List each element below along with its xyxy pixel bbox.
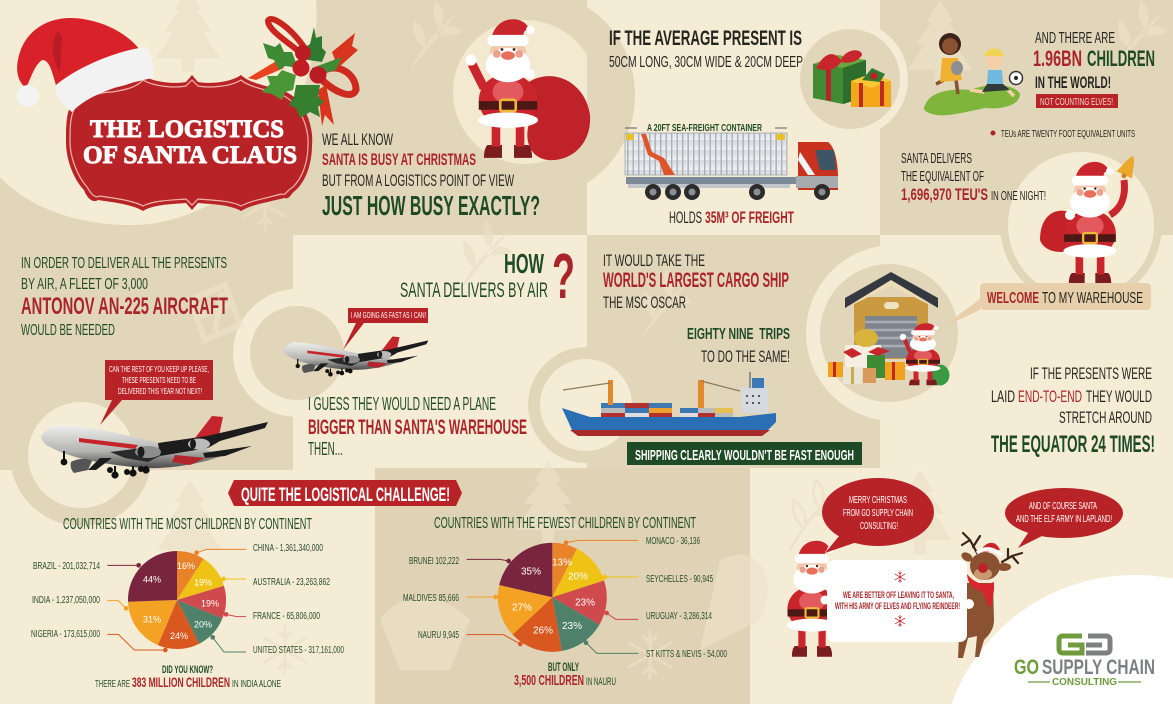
intro text xyxy=(322,130,540,221)
children count text xyxy=(1033,30,1155,92)
pie chart: fewest children: 23% xyxy=(575,598,595,608)
shipping caption xyxy=(627,442,862,465)
santa delivers text: SANTA DELIVERS xyxy=(901,150,972,167)
message card: WE ARE BETTER OFF LEAVING IT TO SANTA, xyxy=(843,590,954,600)
heading: most children: COUNTRIES WITH THE MOST CHILDREN BY CONTINENT xyxy=(63,516,312,533)
bigger plane text xyxy=(308,394,527,459)
logo: go supply chain consulting xyxy=(1014,636,1155,688)
nauru note xyxy=(514,660,616,689)
icon: santa holding card xyxy=(787,541,837,657)
leader lines and labels: most children: AUSTRALIA - 23,263,862 xyxy=(253,577,330,588)
how santa delivers heading xyxy=(400,240,575,312)
did you know note: 383 MILLION CHILDREN xyxy=(132,674,230,690)
title text xyxy=(83,116,297,169)
pie chart: most children: 19% xyxy=(194,578,212,588)
leader lines and labels: fewest children xyxy=(403,536,727,660)
icon: santa with bell xyxy=(1040,152,1141,284)
pie chart: fewest children: 35% xyxy=(521,566,541,578)
leader lines and labels: fewest children: URUGUAY - 3,286,314 xyxy=(646,611,712,622)
freight capacity text: HOLDS xyxy=(669,208,702,227)
icon: large airplane xyxy=(41,416,268,479)
title badge xyxy=(66,75,312,211)
icon: warehouse with santa and gifts xyxy=(828,272,950,386)
intro text: SANTA IS BUSY AT CHRISTMAS xyxy=(322,150,476,169)
intro text: WE ALL KNOW xyxy=(322,130,393,149)
bigger plane text: THEN... xyxy=(308,439,343,459)
pie chart: fewest children: 20% xyxy=(568,572,588,582)
pie chart: fewest children xyxy=(498,543,607,652)
leader lines and labels: most children: NIGERIA - 173,615,000 xyxy=(31,629,100,640)
cargo ship text: THE MSC OSCAR xyxy=(603,293,686,312)
equator text xyxy=(991,364,1155,458)
leader lines and labels: fewest children: BRUNEI 102,222 xyxy=(409,556,459,567)
how santa delivers heading: ? xyxy=(552,240,575,312)
icon: santa with sack xyxy=(466,19,590,160)
children count text: AND THERE ARE xyxy=(1035,30,1115,47)
pie chart: most children: 31% xyxy=(143,614,161,624)
snowflake top xyxy=(895,571,905,583)
heading: fewest children: COUNTRIES WITH THE FEWEST CHILDREN BY CONTINENT xyxy=(434,515,696,532)
pie chart: most children: 44% xyxy=(143,574,161,584)
callout: large plane: DELIVERED THIS YEAR NOT NEXT! xyxy=(118,386,202,396)
children count text: IN THE WORLD! xyxy=(1035,73,1111,92)
pie chart: most children xyxy=(128,551,226,649)
intro text: BUT FROM A LOGISTICS POINT OF VIEW xyxy=(322,171,514,190)
speech bubble: and of course santa: AND OF COURSE SANTA xyxy=(1029,501,1097,512)
not counting elves tag xyxy=(1036,94,1118,108)
callout: large plane: THESE PRESENTS NEED TO BE xyxy=(122,375,196,385)
leader lines and labels: fewest children: MALDIVES 85,666 xyxy=(403,593,459,604)
leader lines and labels: fewest children: NAURU 9,945 xyxy=(418,630,459,641)
did you know note: DID YOU KNOW? xyxy=(162,664,213,676)
icon: reindeer xyxy=(958,533,1022,658)
leader lines and labels: most children: UNITED STATES - 317,161,000 xyxy=(253,645,344,656)
santa delivers text: IN ONE NIGHT! xyxy=(991,188,1046,203)
speech bubble: and of course santa xyxy=(1005,488,1123,548)
freight capacity text xyxy=(669,208,794,227)
children count text: 1.96BN xyxy=(1033,46,1082,71)
pie chart: most children: 24% xyxy=(170,631,188,641)
leader lines and labels: most children: BRAZIL - 201,032,714 xyxy=(33,561,100,572)
how santa delivers heading: SANTA DELIVERS BY AIR xyxy=(400,279,548,302)
speech bubble: merry christmas: FROM GO SUPPLY CHAIN xyxy=(843,508,913,519)
leader lines and labels: most children: CHINA - 1,361,340,000 xyxy=(253,543,323,554)
leader lines and labels: fewest children: SEYCHELLES - 90,945 xyxy=(646,574,713,585)
white logo corner xyxy=(952,575,1173,704)
freight capacity text: 35M³ OF FREIGHT xyxy=(705,208,794,227)
container label: A 20FT SEA-FREIGHT CONTAINER xyxy=(647,123,763,134)
air fleet text xyxy=(21,255,228,339)
speech bubble: welcome xyxy=(941,283,1151,328)
logo: go supply chain consulting: GO xyxy=(1014,656,1039,679)
did you know note: THERE ARE xyxy=(95,678,130,690)
message card: WITH HIS ARMY OF ELVES AND FLYING REINDEER! xyxy=(835,601,960,611)
icon: children playing xyxy=(924,33,1022,115)
equator text: LAID xyxy=(991,387,1015,406)
intro text: JUST HOW BUSY EXACTLY? xyxy=(322,190,540,221)
nauru note: 3,500 CHILDREN xyxy=(514,672,584,689)
bigger plane text: I GUESS THEY WOULD NEED A PLANE xyxy=(308,394,496,414)
callout: small plane xyxy=(343,308,428,350)
leader lines and labels: fewest children: ST KITTS & NEVIS - 54,000 xyxy=(646,649,727,660)
bigger plane text: BIGGER THAN SANTA'S WAREHOUSE xyxy=(308,416,527,439)
leader lines and labels: most children: FRANCE - 65,806,000 xyxy=(253,611,320,622)
leader lines and labels: most children xyxy=(31,543,344,656)
speech bubble: and of course santa: AND THE ELF ARMY IN LAPLAND! xyxy=(1016,514,1112,525)
shipping caption: SHIPPING CLEARLY WOULDN'T BE FAST ENOUGH xyxy=(635,447,854,464)
speech bubble: merry christmas: CONSULTING! xyxy=(860,521,898,532)
icon: container ship xyxy=(562,372,776,436)
air fleet text: ANTONOV AN-225 AIRCRAFT xyxy=(21,293,228,320)
equator text: END-TO-END xyxy=(1018,387,1082,406)
air fleet text: IN ORDER TO DELIVER ALL THE PRESENTS xyxy=(21,255,227,272)
present dimensions text: 50CM LONG, 30CM WIDE & 20CM DEEP xyxy=(609,54,803,71)
icon: container truck xyxy=(625,128,838,200)
not counting elves tag: NOT COUNTING ELVES! xyxy=(1040,97,1113,108)
cargo ship text: EIGHTY NINE TRIPS xyxy=(687,326,790,343)
hands over card xyxy=(820,596,974,609)
icon: gift boxes xyxy=(813,50,891,107)
icon: santa hat xyxy=(17,18,154,112)
cargo ship text: WORLD'S LARGEST CARGO SHIP xyxy=(603,269,789,292)
title text: THE LOGISTICS xyxy=(90,116,284,143)
air fleet text: WOULD BE NEEDED xyxy=(21,322,115,339)
leader lines and labels: fewest children: MONACO - 36,136 xyxy=(646,536,700,547)
speech bubble: merry christmas: MERRY CHRISTMAS xyxy=(849,495,907,506)
callout: large plane: CAN THE REST OF YOU KEEP UP PLEASE, xyxy=(109,364,209,374)
message card xyxy=(827,560,967,642)
banner: quite the logistical challenge xyxy=(228,480,462,506)
present dimensions text xyxy=(609,27,803,71)
santa delivers text xyxy=(901,150,1046,204)
santa delivers text: 1,696,970 TEU'S xyxy=(901,185,988,204)
title text: OF SANTA CLAUS xyxy=(83,142,297,169)
speech bubble: merry christmas xyxy=(822,478,934,553)
pie chart: fewest children: 27% xyxy=(512,602,532,614)
present dimensions text: IF THE AVERAGE PRESENT IS xyxy=(609,27,802,50)
pie chart: most children: 16% xyxy=(177,561,195,571)
pie chart: fewest children: 13% xyxy=(552,558,572,568)
how santa delivers heading: HOW xyxy=(504,248,544,279)
cargo ship text: TO DO THE SAME! xyxy=(701,347,790,366)
pie chart: fewest children: 26% xyxy=(533,626,553,636)
speech bubble: welcome: WELCOME xyxy=(987,290,1039,307)
callout: large plane xyxy=(100,360,213,425)
pie chart: fewest children: 23% xyxy=(562,621,582,632)
did you know note: IN INDIA ALONE xyxy=(232,678,281,690)
air fleet text: BY AIR, A FLEET OF 3,000 xyxy=(21,276,148,293)
leader lines and labels: most children: INDIA - 1,237,050,000 xyxy=(32,595,100,606)
nauru note: IN NAURU xyxy=(586,676,616,688)
cargo ship text: IT WOULD TAKE THE xyxy=(603,251,705,270)
banner: quite the logistical challenge: QUITE THE LOGISTICAL CHALLENGE! xyxy=(241,485,450,506)
logo: go supply chain consulting: CONSULTING xyxy=(1052,677,1117,688)
santa delivers text: THE EQUIVALENT OF xyxy=(901,168,984,185)
icon: small airplane xyxy=(283,337,428,377)
did you know note xyxy=(95,664,281,690)
pie chart: most children: 20% xyxy=(194,620,212,630)
nauru note: BUT ONLY xyxy=(548,660,579,674)
cargo ship text xyxy=(603,251,790,366)
icon: holly and ribbon xyxy=(248,19,358,126)
callout: small plane: I AM GOING AS FAST AS I CAN! xyxy=(351,311,426,320)
pie chart: most children: 19% xyxy=(201,598,219,608)
